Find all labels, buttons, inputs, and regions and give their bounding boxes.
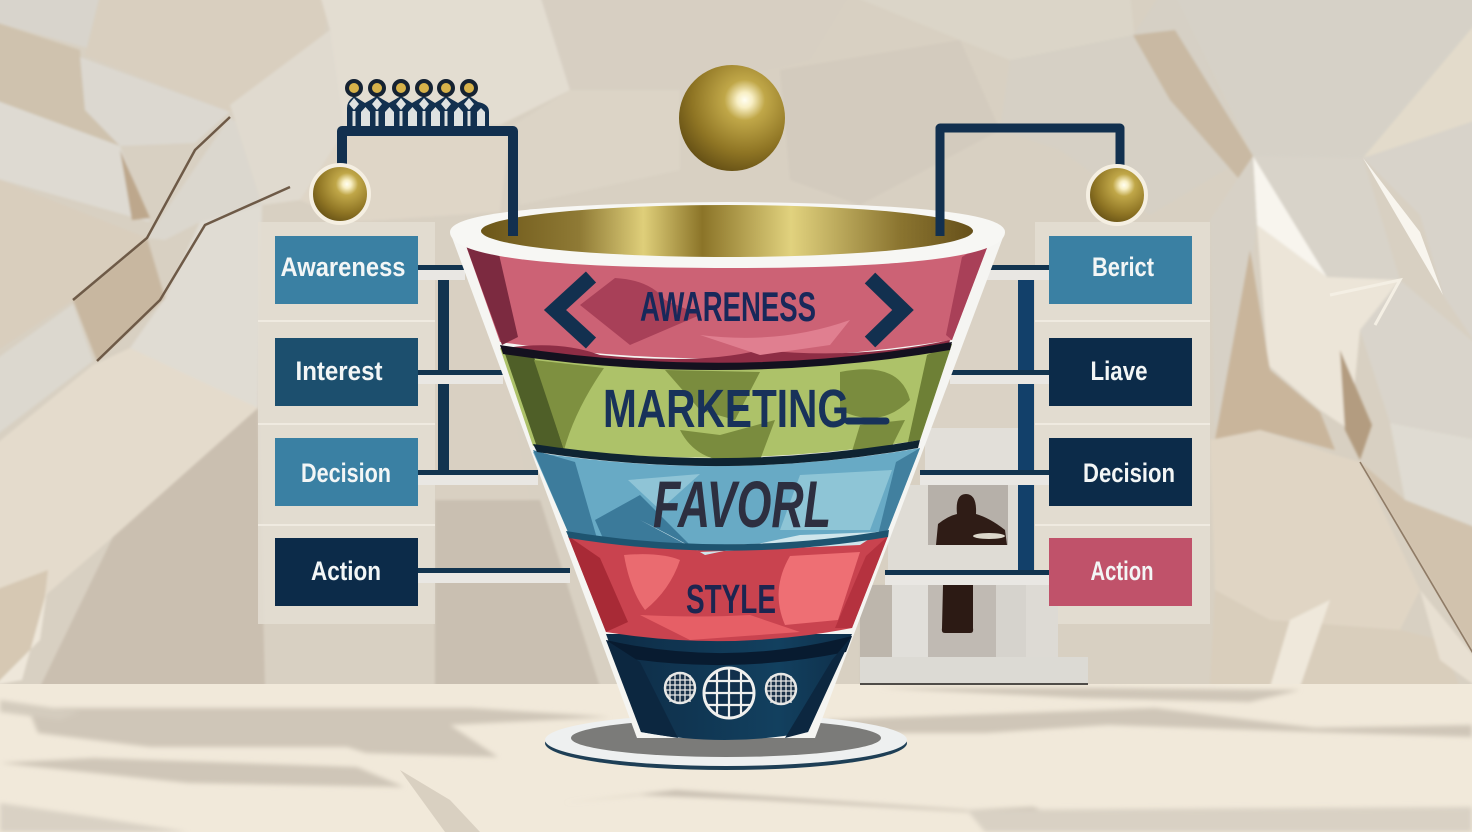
icon: right globe [766, 674, 796, 704]
icon: people group [347, 81, 489, 127]
floor [0, 684, 1472, 832]
icon: center globe [704, 668, 754, 718]
connector: left tree line [342, 131, 513, 236]
right side [1000, 0, 1250, 215]
funnel rim and gold interior [450, 202, 1005, 268]
connector lines left [418, 265, 570, 583]
left side [0, 0, 100, 50]
label: left Awareness: Awareness [280, 252, 406, 282]
label: right Action: Action [1090, 556, 1154, 586]
label: left Interest: Interest [296, 356, 382, 386]
label: left Decision: Decision [301, 458, 391, 488]
funnel layer: style [568, 536, 888, 641]
label: right Action [1049, 538, 1192, 606]
panel: left labels background [258, 222, 435, 624]
icon: top gold sphere [679, 65, 785, 171]
top centre [320, 0, 570, 130]
label: FAVORL: FAVORL [653, 467, 831, 541]
label: right Berict: Berict [1092, 252, 1154, 282]
icon: left gold sphere [311, 165, 369, 223]
funnel layer: marketing [500, 344, 952, 462]
display shelf with statue [860, 428, 1088, 685]
funnel dark band under awareness [500, 342, 952, 370]
behind the panels [435, 500, 600, 687]
label: right Decision: Decision [1083, 458, 1175, 488]
label: left Awareness [275, 236, 418, 304]
funnel white outline [450, 232, 1005, 738]
funnel dark band under marketing [533, 440, 920, 466]
icon: right gold sphere [1088, 166, 1146, 224]
icon: left chevron [555, 277, 591, 343]
base plate [545, 714, 907, 770]
label: STYLE: STYLE [686, 576, 776, 622]
label: AWARENESS: AWARENESS [640, 283, 816, 330]
connector: right tree line [940, 128, 1120, 236]
label: MARKETING: MARKETING [603, 379, 849, 439]
funnel dark band under favorl [566, 530, 889, 551]
icon: left globe [665, 673, 695, 703]
label: left Decision [275, 438, 418, 506]
label: right Berict [1049, 236, 1192, 304]
funnel layer: navy globes [606, 634, 852, 740]
funnel layer: awareness [464, 240, 990, 551]
funnel layer: favorl [533, 448, 920, 555]
label: right Decision [1049, 438, 1192, 506]
icon: statue [936, 494, 1007, 633]
label: right Liave [1049, 338, 1192, 406]
panel: right labels background [1035, 222, 1210, 624]
label: left Action: Action [311, 556, 381, 586]
icon: right chevron [870, 278, 903, 342]
label: left Interest [275, 338, 418, 406]
funnel [450, 202, 1005, 740]
label: left Action [275, 538, 418, 606]
connector lines right [885, 265, 1049, 585]
label: right Liave: Liave [1090, 356, 1148, 386]
